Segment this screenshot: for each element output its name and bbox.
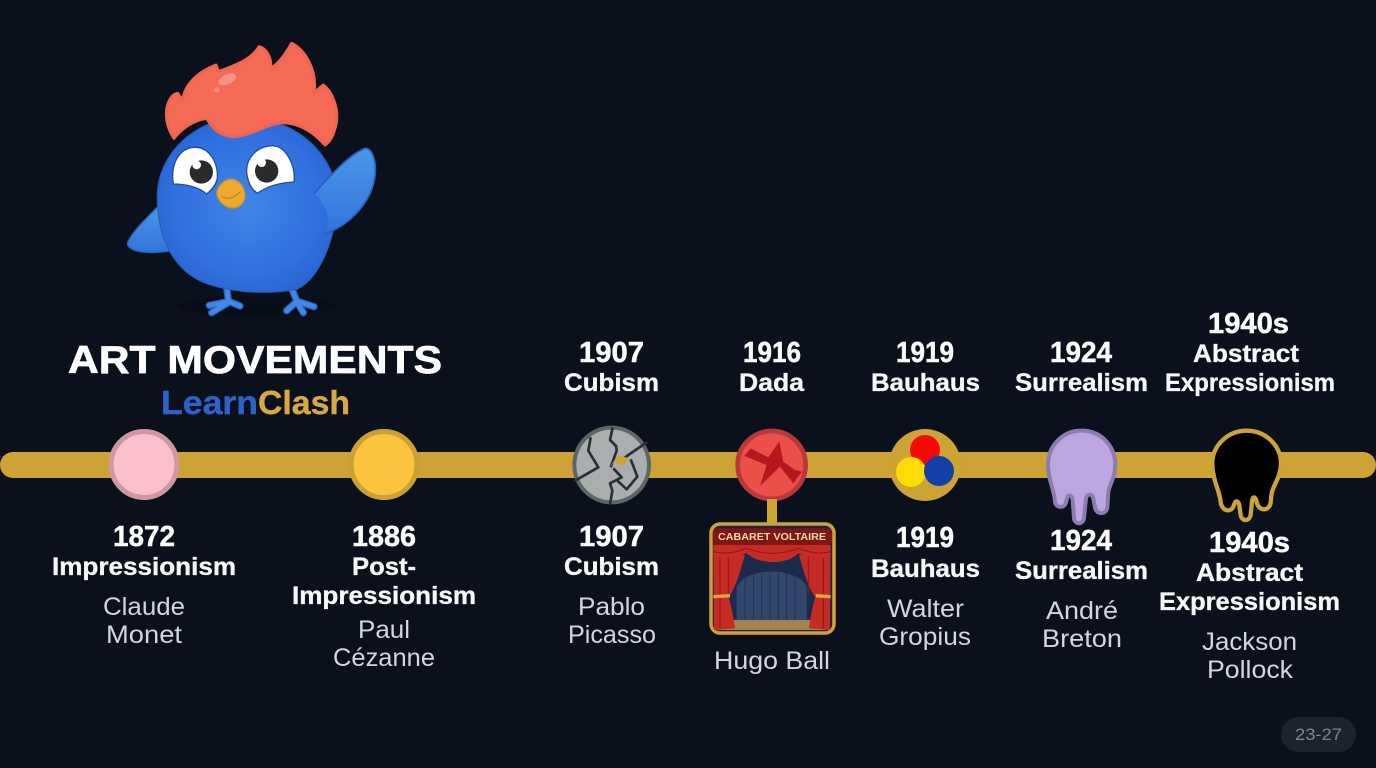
hair [166, 43, 337, 145]
side curtains [713, 546, 745, 630]
beak [217, 179, 245, 208]
brand name: Clash [258, 384, 350, 421]
label: 1940s Abstract Expressionism, Jackson Pollock: Expressionism [1159, 588, 1340, 616]
label: 1924 Surrealism above: Surrealism [1015, 369, 1148, 397]
swag [713, 545, 831, 562]
timeline bar [0, 452, 1376, 478]
label: 1916 Dada above: 1916 [743, 337, 801, 369]
label: 1924 Surrealism, André Breton [1015, 525, 1148, 653]
backdrop [713, 528, 832, 630]
label: 1886 Post-Impressionism, Paul Cézanne: 1886 [352, 521, 416, 553]
right wing [314, 148, 375, 234]
label: 1907 Cubism above: 1907 [579, 337, 644, 369]
label: 1924 Surrealism, André Breton: 1924 [1050, 525, 1112, 557]
label: 1919 Bauhaus, Walter Gropius [871, 522, 980, 651]
node: Surrealism lilac drip [1048, 431, 1115, 523]
label: 1940s Abstract Expressionism above [1165, 308, 1335, 397]
label: 1940s Abstract Expressionism, Jackson Pollock: 1940s [1209, 527, 1290, 559]
label: 1872 Impressionism, Claude Monet: Claude [103, 593, 185, 621]
label: 1886 Post-Impressionism, Paul Cézanne: Cézanne [333, 644, 435, 672]
label: 1924 Surrealism above [1015, 337, 1148, 397]
left eye [173, 147, 217, 194]
label: 1940s Abstract Expressionism, Jackson Pollock: Pollock [1207, 656, 1294, 684]
label: 1919 Bauhaus above: 1919 [896, 337, 954, 369]
brand name [161, 384, 350, 421]
label: 1940s Abstract Expressionism above: 1940s [1208, 308, 1289, 340]
page badge [1281, 717, 1356, 752]
label: 1940s Abstract Expressionism above: Abstract [1193, 340, 1300, 368]
node: Dada red zigzag circle [738, 431, 806, 499]
left wing [127, 206, 172, 253]
right foot [287, 288, 314, 313]
label: 1916 Dada above [739, 337, 805, 397]
label: 1886 Post-Impressionism, Paul Cézanne: Impressionism [292, 582, 476, 610]
label: 1907 Cubism, Pablo Picasso: Picasso [568, 621, 656, 649]
label: 1886 Post-Impressionism, Paul Cézanne: Post- [352, 553, 416, 581]
label: 1919 Bauhaus, Walter Gropius: Bauhaus [871, 555, 980, 583]
label: 1940s Abstract Expressionism above: Expressionism [1165, 369, 1335, 397]
left foot [209, 287, 240, 313]
title: ART MOVEMENTS [68, 339, 442, 382]
label: 1907 Cubism above [564, 337, 659, 397]
body [157, 117, 337, 292]
label: 1919 Bauhaus above: Bauhaus [871, 369, 980, 397]
label: 1907 Cubism above: Cubism [564, 369, 659, 397]
label: 1940s Abstract Expressionism, Jackson Pollock [1159, 527, 1340, 684]
node: Abstract Expressionism black drip [1212, 431, 1281, 520]
brand name: Learn [161, 384, 258, 421]
connector: Dada to stage [767, 499, 777, 525]
label: 1924 Surrealism, André Breton: Surrealism [1015, 557, 1148, 585]
label: 1886 Post-Impressionism, Paul Cézanne [292, 521, 476, 672]
node: Post-Impressionism yellow circle [351, 432, 417, 498]
label: 1940s Abstract Expressionism, Jackson Pollock: Abstract [1196, 559, 1304, 587]
label: 1886 Post-Impressionism, Paul Cézanne: Paul [358, 616, 410, 644]
label: 1872 Impressionism, Claude Monet: Impressionism [52, 553, 236, 581]
label: 1872 Impressionism, Claude Monet: Monet [106, 621, 182, 649]
label: 1919 Bauhaus, Walter Gropius: Walter [887, 595, 964, 623]
label: 1907 Cubism, Pablo Picasso: 1907 [579, 521, 644, 553]
node: Bauhaus primary colours [889, 429, 961, 501]
mascot: blue bird [127, 43, 375, 317]
icon: Cabaret Voltaire stage [711, 524, 834, 633]
label: 1924 Surrealism above: 1924 [1050, 337, 1112, 369]
label: 1924 Surrealism, André Breton: André [1046, 597, 1118, 625]
icon: Cabaret Voltaire stage: CABARET VOLTAIRE [718, 531, 826, 543]
label: 1919 Bauhaus above [871, 337, 980, 397]
header band [713, 528, 832, 545]
label: 1907 Cubism, Pablo Picasso: Pablo [578, 593, 645, 621]
label: 1907 Cubism, Pablo Picasso: Cubism [564, 553, 659, 581]
label: 1919 Bauhaus, Walter Gropius: Gropius [879, 623, 971, 651]
label: 1940s Abstract Expressionism, Jackson Pollock: Jackson [1202, 628, 1297, 656]
label: 1872 Impressionism, Claude Monet: 1872 [113, 521, 175, 553]
label: 1907 Cubism, Pablo Picasso [564, 521, 659, 649]
page badge: 23-27 [1295, 725, 1342, 744]
right eye [247, 146, 294, 193]
label: 1872 Impressionism, Claude Monet [52, 521, 236, 649]
label: Hugo Ball: Hugo Ball [714, 647, 830, 675]
label: 1919 Bauhaus, Walter Gropius: 1919 [896, 522, 954, 554]
node: Cubism cracked circle [574, 427, 649, 505]
label: 1924 Surrealism, André Breton: Breton [1042, 625, 1122, 653]
label: 1916 Dada above: Dada [739, 369, 805, 397]
node: Impressionism pink circle [111, 432, 177, 498]
